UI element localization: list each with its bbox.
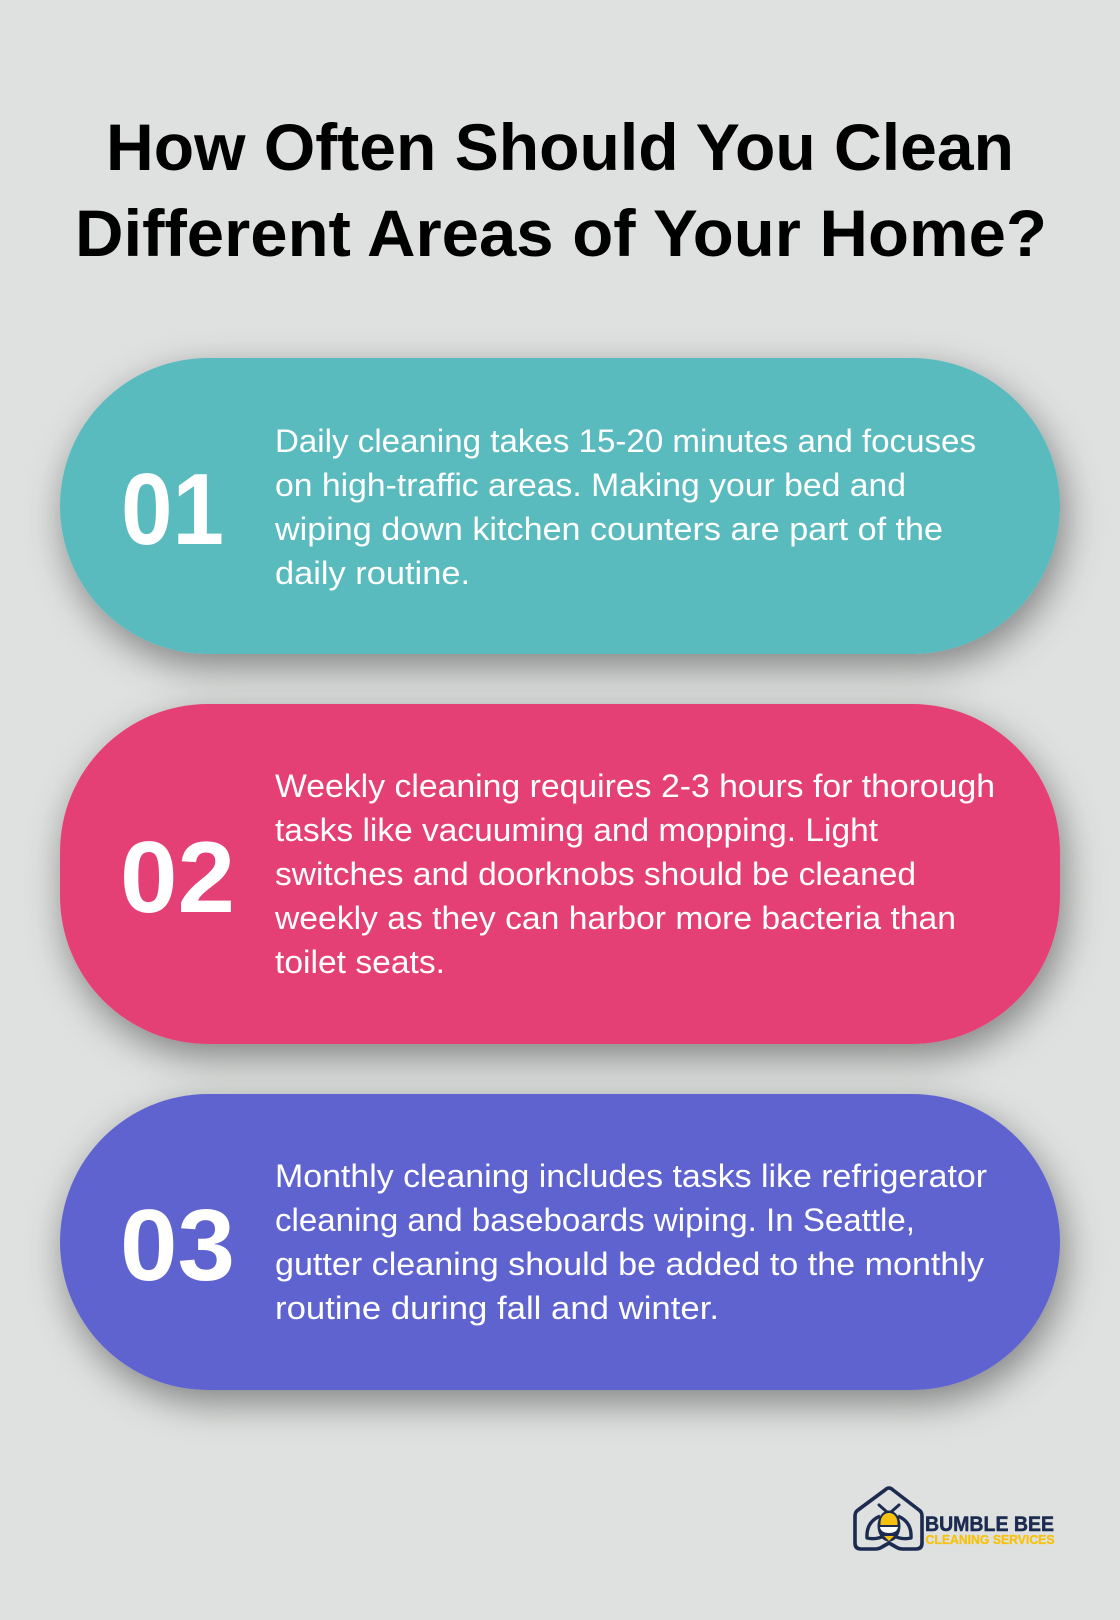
- pill: daily: [60, 358, 1060, 654]
- text: daily: wiping down kitchen counters are part of the: [274, 511, 943, 547]
- icon: house with bee: [855, 1488, 922, 1549]
- text: daily: Daily cleaning takes 15-20 minutes and focuses: [275, 423, 976, 459]
- title: How Often Should You Clean: [106, 111, 1014, 184]
- title: Different Areas of Your Home?: [75, 197, 1047, 270]
- pill: weekly: [60, 704, 1060, 1044]
- number 03: 03: [120, 1190, 235, 1302]
- logo tagline: CLEANING SERVICES: [926, 1532, 1055, 1547]
- text: daily: on high-traffic areas. Making your bed and: [275, 467, 906, 503]
- text: weekly: [274, 768, 995, 980]
- title: [75, 111, 1047, 270]
- text: monthly: [275, 1158, 987, 1326]
- text: weekly: Weekly cleaning requires 2-3 hours for thorough: [275, 768, 995, 804]
- text: monthly: Monthly cleaning includes tasks like refrigerator: [275, 1158, 987, 1194]
- number 02: 02: [120, 822, 235, 934]
- logo name: BUMBLE BEE: [925, 1513, 1054, 1536]
- text: weekly: weekly as they can harbor more bacteria than: [274, 900, 956, 936]
- text: weekly: toilet seats.: [275, 944, 445, 980]
- text: monthly: cleaning and baseboards wiping. In Seattle,: [275, 1202, 915, 1238]
- text: weekly: tasks like vacuuming and mopping. Light: [275, 812, 878, 848]
- pill: monthly: [60, 1094, 1060, 1390]
- text: daily: daily routine.: [275, 555, 470, 591]
- text: monthly: gutter cleaning should be added to the monthly: [275, 1246, 984, 1282]
- text: monthly: routine during fall and winter.: [275, 1290, 719, 1326]
- panel: daily cleaning: [60, 358, 1060, 654]
- logo: Bumble Bee Cleaning Services: [855, 1488, 1055, 1549]
- panel: monthly cleaning: [60, 1094, 1060, 1390]
- number 01: 01: [121, 454, 224, 566]
- panel: weekly cleaning: [60, 704, 1060, 1044]
- text: daily: [274, 423, 976, 591]
- text: weekly: switches and doorknobs should be cleaned: [275, 856, 916, 892]
